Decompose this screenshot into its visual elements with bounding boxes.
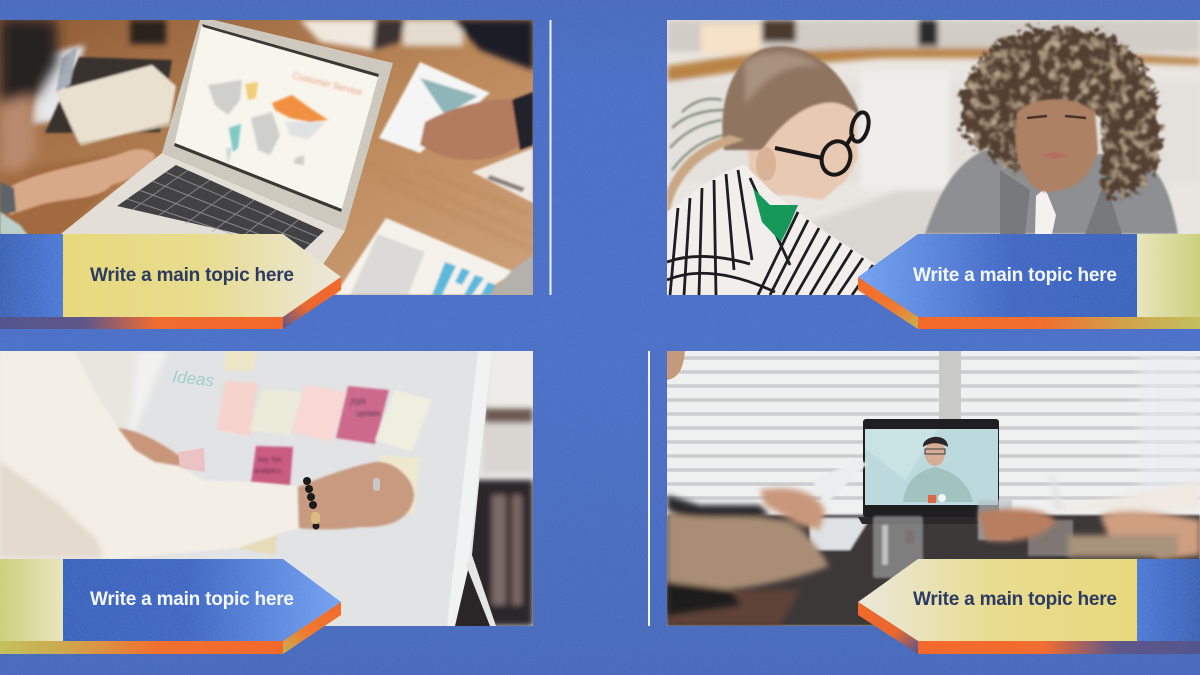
striped shirt — [667, 165, 877, 295]
right meeting participants' hands — [978, 475, 1200, 560]
banner: bottom left topic: Write a main topic here — [90, 589, 294, 610]
white sleeved arms and hands — [0, 351, 414, 560]
photo: hands placing sticky notes on whiteboard — [0, 351, 533, 626]
sticky notes: key Tes — [258, 457, 282, 464]
woman with curly hair — [925, 23, 1178, 234]
tablet and right hand — [379, 62, 533, 203]
banner: top right topic — [858, 234, 1200, 329]
sticky notes: JSR — [349, 397, 367, 407]
whiteboard: Ideas — [172, 367, 215, 390]
banner: bottom left topic — [0, 559, 342, 654]
photo: laptop with world map on wooden table — [0, 18, 533, 295]
banner: top left topic — [0, 234, 341, 329]
laptop — [60, 20, 393, 264]
photo: video call meeting at conference table — [667, 351, 1200, 626]
banner: top right topic: Write a main topic here — [913, 265, 1117, 286]
sticky notes — [217, 351, 432, 555]
water glasses — [873, 500, 1073, 578]
paper held in hand — [812, 460, 867, 500]
banner: bottom right topic — [858, 559, 1200, 654]
woman with glasses — [667, 46, 877, 295]
person's left hand — [0, 149, 155, 235]
sticky notes: update — [356, 409, 381, 418]
person's head — [0, 18, 58, 172]
sticky notes: analytics — [254, 468, 282, 475]
banner: bottom right topic: Write a main topic here — [913, 589, 1117, 610]
white vertical divider bottom — [648, 351, 650, 626]
banner: top left topic: Write a main topic here — [90, 265, 294, 286]
dark planner and notebook — [45, 45, 176, 146]
glasses — [775, 110, 872, 179]
white vertical divider top — [550, 20, 552, 295]
plant — [670, 99, 725, 170]
left meeting participants — [667, 488, 829, 615]
table — [667, 515, 1200, 626]
world map on screen — [208, 70, 363, 165]
printed report with blue bars — [335, 218, 533, 295]
window blinds — [667, 358, 1200, 498]
world map on screen: Customer Service — [292, 70, 363, 97]
photo: two women in kitchen — [667, 20, 1200, 295]
whiteboard — [103, 351, 496, 626]
laptop on video call — [858, 419, 999, 524]
